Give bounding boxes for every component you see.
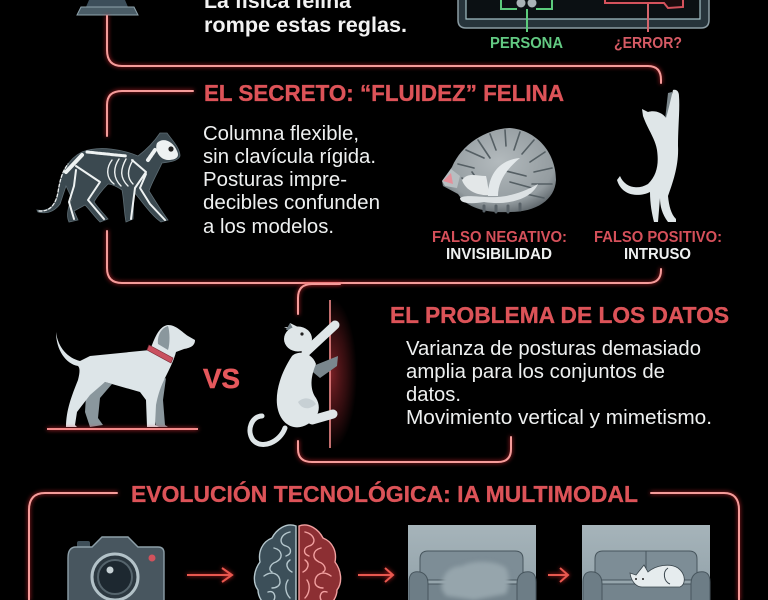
icon: dog (47, 325, 198, 429)
text: secreto body: Columna flexible, (203, 122, 359, 145)
heading: problema: EL PROBLEMA DE LOS DATOS (390, 302, 729, 328)
label: falso negativo: INVISIBILIDAD (446, 246, 552, 263)
text: secreto body: sin clavícula rígida. (203, 145, 376, 168)
text: secreto body: a los modelos. (203, 215, 334, 238)
text: secreto body: decibles confunden (203, 191, 380, 214)
text: secreto body: Posturas impre- (203, 168, 347, 191)
icon: cat skeleton (37, 133, 180, 222)
neon connector: section frame (107, 91, 661, 283)
icon: brain (254, 525, 341, 600)
icon: camera (68, 537, 164, 600)
label: persona: PERSONA (490, 35, 563, 52)
intro text (204, 0, 407, 37)
intro text: rompe estas reglas. (204, 14, 407, 37)
arrow: camera to brain (187, 568, 232, 582)
label: falso positivo: INTRUSO (624, 246, 691, 263)
label: error: ¿ERROR? (614, 35, 682, 52)
text: problema body (406, 337, 712, 429)
text: problema body: Varianza de posturas demasiado (406, 337, 701, 360)
icon: climbing cat on wall (250, 298, 357, 450)
arrow: blurred sofa to clear sofa (548, 568, 568, 582)
text: problema body: Movimiento vertical y mimetismo. (406, 406, 712, 429)
icon: sleeping tabby cat (442, 128, 556, 212)
icon: standing cat (617, 90, 679, 222)
neon connector: data section (298, 284, 511, 462)
label: falso positivo: FALSO POSITIVO: (594, 229, 722, 246)
text: problema body: datos. (406, 383, 461, 406)
label: falso negativo (432, 229, 567, 263)
panel: sofa with cat (582, 525, 710, 600)
text: secreto body (203, 122, 380, 238)
detection monitor (458, 0, 709, 32)
label: falso positivo (594, 229, 722, 263)
heading: secreto: EL SECRETO: “FLUIDEZ” FELINA (204, 80, 564, 106)
text: vs: VS (203, 363, 240, 394)
heading: evolucion: EVOLUCIÓN TECNOLÓGICA: IA MULTIMODAL (131, 480, 638, 507)
label: falso negativo: FALSO NEGATIVO: (432, 229, 567, 246)
neon connector: top (107, 16, 661, 83)
icon: pedestal (77, 0, 138, 15)
panel: blurred sofa (408, 525, 536, 600)
text: problema body: amplia para los conjuntos de (406, 360, 665, 383)
dog ground line (47, 428, 198, 430)
neon connector: technology frame (29, 493, 739, 600)
arrow: brain to blurred sofa (358, 568, 393, 582)
